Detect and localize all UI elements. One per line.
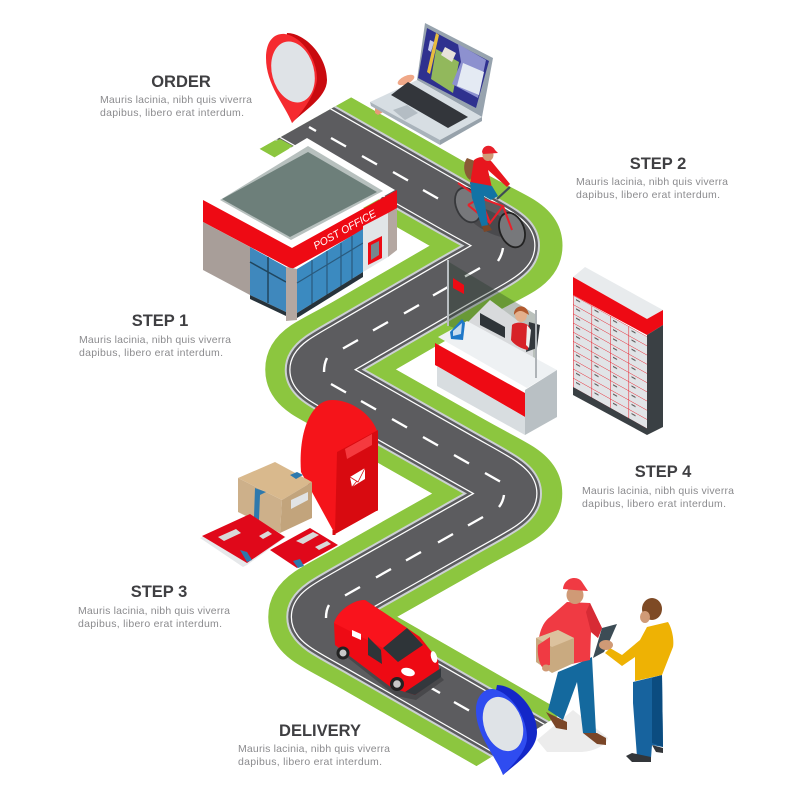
roof — [203, 138, 395, 248]
label: step 1: Mauris lacinia, nibh quis viverra — [79, 334, 231, 346]
red van — [334, 600, 444, 700]
post office building — [203, 138, 397, 321]
mailbox — [301, 400, 378, 535]
label: step 4: STEP 4 — [635, 463, 692, 481]
label: delivery: dapibus, libero erat interdum. — [238, 756, 382, 768]
label: delivery: Mauris lacinia, nibh quis viverra — [238, 743, 390, 755]
cardboard box — [238, 462, 312, 533]
small green verge end near start — [267, 139, 293, 153]
laptop — [370, 23, 493, 145]
label: step 2: dapibus, libero erat interdum. — [576, 189, 720, 201]
reception desk with clerk — [435, 260, 557, 435]
label: step 4: Mauris lacinia, nibh quis viverra — [582, 485, 734, 497]
label: step 1 — [79, 312, 231, 359]
label: step 4: dapibus, libero erat interdum. — [582, 498, 726, 510]
label: step 4 — [582, 463, 734, 510]
label: order — [100, 73, 252, 119]
label: step 3 — [78, 583, 230, 630]
label: step 3: dapibus, libero erat interdum. — [78, 618, 222, 630]
label: step 1: dapibus, libero erat interdum. — [79, 347, 223, 359]
ground shadow under people — [537, 710, 608, 752]
sign text: POST OFFICE — [311, 207, 379, 252]
reception shadow on road — [449, 262, 535, 360]
road with green verges — [270, 103, 560, 762]
cyclist — [450, 146, 530, 251]
customer with clipboard — [593, 598, 673, 762]
label: order: Mauris lacinia, nibh quis viverra — [100, 94, 252, 106]
order location pin — [265, 33, 327, 123]
label: step 3: STEP 3 — [131, 583, 187, 601]
parcel locker — [573, 267, 663, 435]
clerk — [511, 306, 540, 352]
label: step 3: Mauris lacinia, nibh quis viverra — [78, 605, 230, 617]
label: step 2 — [576, 155, 728, 201]
label: step 2: Mauris lacinia, nibh quis viverra — [576, 176, 728, 188]
courier — [536, 578, 606, 745]
label: order: ORDER — [151, 73, 211, 91]
delivery location pin — [476, 685, 537, 775]
label: delivery: DELIVERY — [279, 722, 361, 740]
label: order: dapibus, libero erat interdum. — [100, 107, 244, 119]
label: step 2: STEP 2 — [630, 155, 686, 173]
red envelopes — [200, 514, 338, 568]
label: step 1: STEP 1 — [132, 312, 188, 330]
label: delivery — [238, 722, 390, 768]
